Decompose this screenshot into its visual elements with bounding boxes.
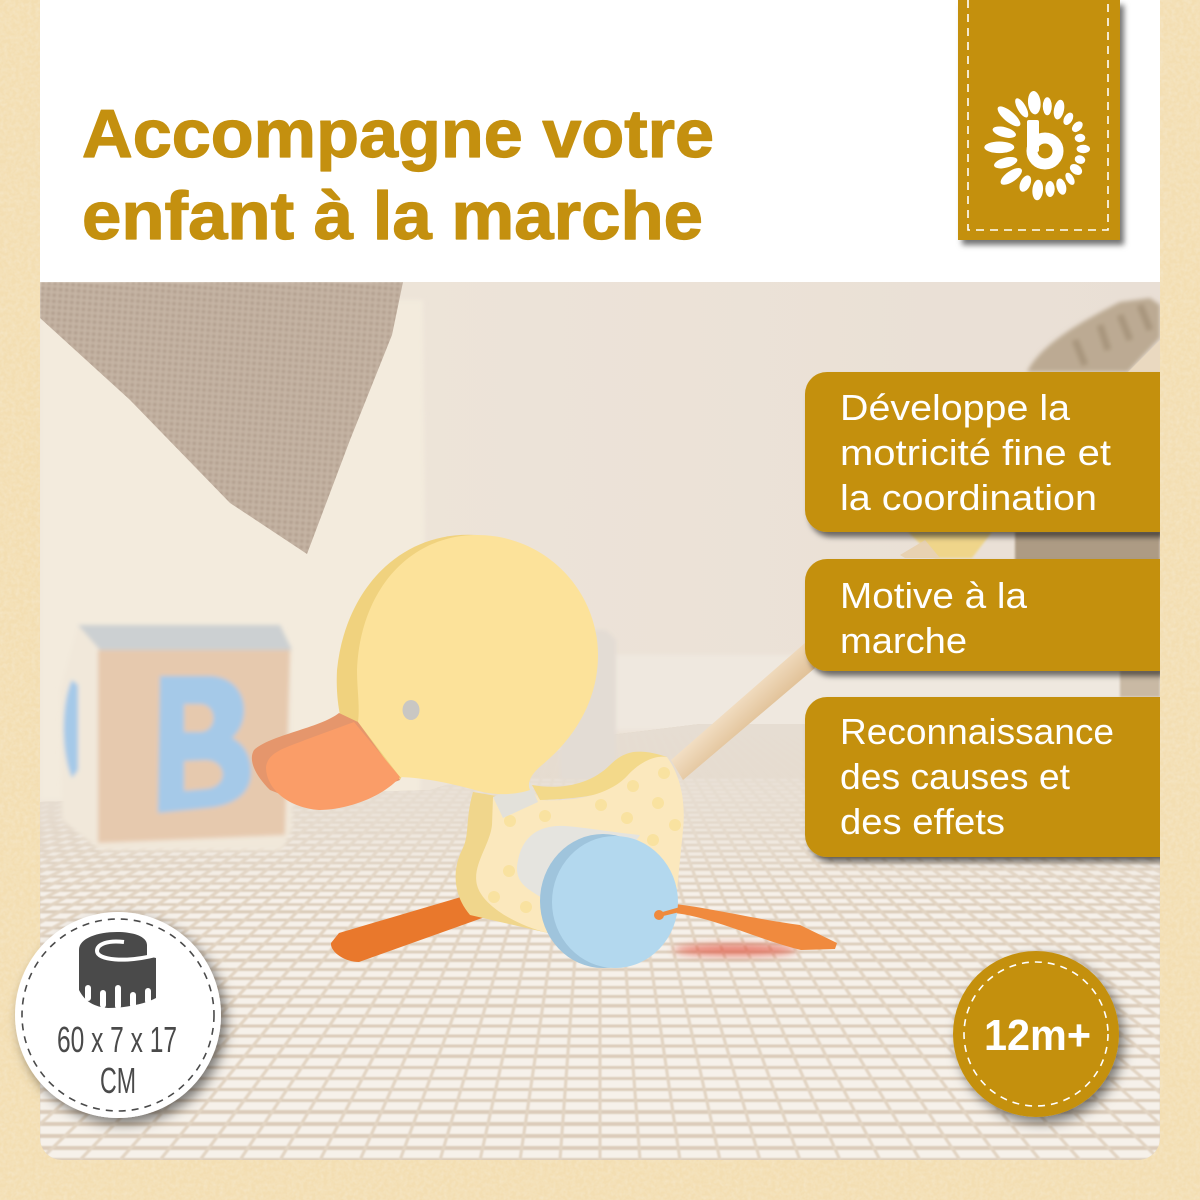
dimensions text [57,1019,177,1101]
benefit pill: motricité [805,372,1170,532]
brown object under middle pill [1120,671,1160,697]
dimensions badge [15,912,221,1118]
duck wing grey [517,826,640,920]
duck beak front [266,722,400,810]
benefit pill: marche [805,559,1170,671]
title: Accompagne votre [82,96,714,172]
benefit pill: causes et effets: Reconnaissance [840,711,1114,752]
age badge: 12m+ [984,1011,1091,1060]
dimensions text: CM [100,1060,136,1101]
white header band [40,0,1160,282]
duck collar [493,782,538,818]
red reflection on carpet [673,944,797,956]
duck body top edge [532,752,667,800]
age badge [953,951,1119,1117]
stick segment upper [900,540,940,558]
duck eye [402,700,420,720]
duck beak side [252,713,400,810]
dimensions text: 60 x 7 x 17 [57,1019,177,1060]
carpet columns [40,788,1160,1158]
title [82,96,714,254]
baseboard [715,659,1119,724]
plush block behind duck [562,633,615,749]
wooden stick [671,643,815,780]
benefit pill: motricité: la coordination [840,477,1097,518]
duck body front [476,757,684,936]
knitted object behind pills [1015,532,1160,562]
benefit pill: motricité: Développe la [840,387,1071,428]
brand label [958,0,1120,240]
duck left foot [331,897,485,962]
duck body side [456,792,548,933]
benefit pill: causes et effets: des causes et [840,756,1070,797]
product photo [0,282,1200,1160]
carpet [40,724,1160,1160]
alphabet block [60,625,292,850]
toy handle yellow piece [908,532,992,558]
cream pillow [40,300,425,800]
blanket [40,282,410,562]
duck head side [337,535,477,780]
benefit pill: marche: marche [840,620,967,661]
benefit pill: causes et effets: des effets [840,801,1005,842]
duck polka dots [488,767,681,913]
logo letter b glyph [1027,120,1058,164]
knitted object top right [1027,298,1160,372]
duck right foot [675,904,837,950]
duck head front [357,535,598,794]
benefit pill: causes et effets [805,697,1170,857]
duck wheel [540,834,680,968]
stick end top right [1128,340,1160,372]
duck toy [252,535,837,968]
logo sunflower [984,90,1090,201]
benefit pill: marche: Motive à la [840,575,1028,616]
icon: measuring tape [79,932,156,1009]
title: enfant à la marche [82,178,703,254]
benefit pill: motricité: motricité fine et [840,432,1111,473]
